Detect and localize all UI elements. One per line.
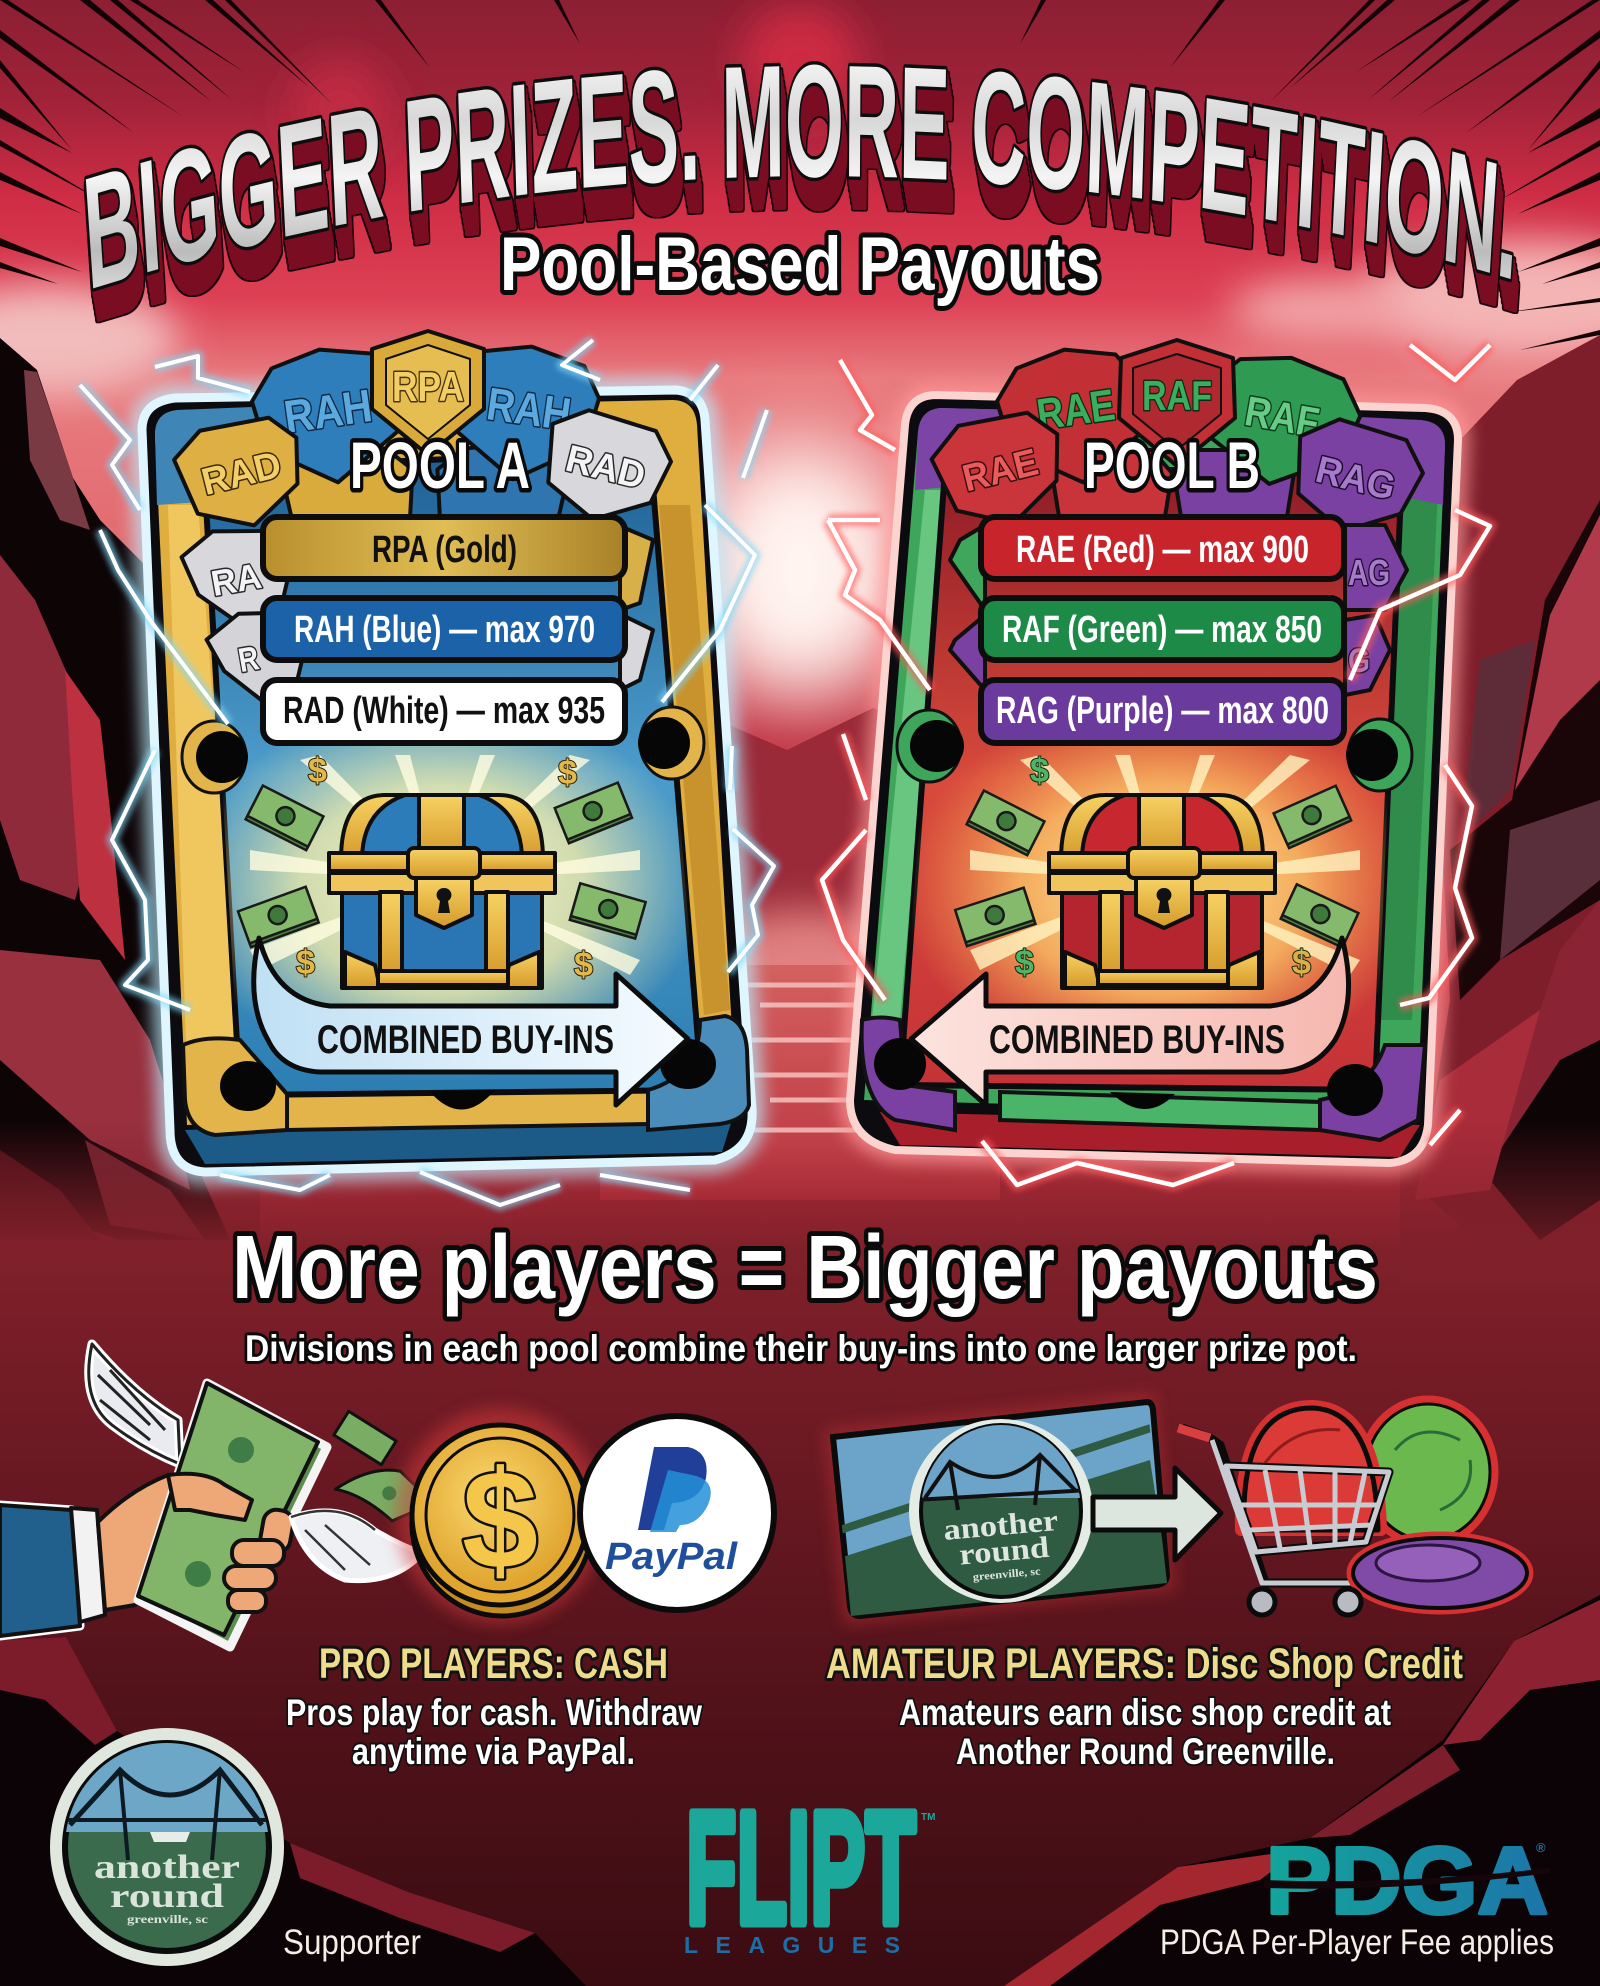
heading: pro players: PRO PLAYERS: CASH: [319, 1640, 668, 1688]
background: bottom left cliff: [0, 1637, 586, 1986]
badge gold right mid: [620, 526, 653, 610]
illustration: pro cash hand and money: [0, 1344, 439, 1647]
badge RAE top: RAE: [1034, 380, 1118, 440]
dollar signs pool A: [296, 752, 593, 984]
icon: paypal: [580, 1416, 774, 1610]
icon: sleeve and cuff: [0, 1505, 105, 1636]
bill: [570, 883, 646, 939]
treasure chest pool B: [1049, 795, 1275, 988]
badge RAD white left low: R: [236, 639, 262, 680]
pill RAF green: RAF (Green) — max 850: [1002, 609, 1322, 651]
icon: shopping cart: [1178, 1428, 1389, 1583]
badge blue lower: [430, 439, 570, 567]
paypal wordmark: PayPal: [605, 1536, 739, 1578]
logo: flipt leagues: LEAGUES: [684, 1932, 900, 1958]
heading: more players: More players = Bigger payouts: [232, 1218, 1378, 1318]
table frame pool A: [142, 390, 752, 1172]
icon: lower wing: [291, 1511, 423, 1581]
logo: another round badge: [50, 1728, 284, 1966]
pill RAH blue: RAH (Blue) — max 970: [294, 609, 595, 651]
dollar signs pool B: $: [1292, 944, 1311, 982]
arrow combined buy-ins pool B: COMBINED BUY-INS: [989, 1018, 1285, 1062]
chest glow pool A: [223, 746, 689, 1076]
badge RAG right: RAG: [1312, 449, 1399, 509]
badge RAF green: RAF: [1242, 387, 1323, 446]
badge RPA: [372, 331, 484, 455]
badges pool A: [169, 331, 678, 713]
badge RAE left: RAE: [959, 441, 1042, 501]
dollar signs pool A: $: [574, 946, 593, 984]
badge purple right mid: [1345, 525, 1407, 610]
background: right cliff: [1415, 335, 1600, 1280]
money pool B: [955, 786, 1358, 947]
pill RAG purple: [981, 680, 1344, 743]
badge RAF top: [1119, 340, 1235, 466]
badges pool B: [925, 340, 1431, 695]
pockets pool B: [874, 710, 1412, 1116]
pill RAE red: RAE (Red) — max 900: [1016, 529, 1309, 571]
badge RAD white: RAD: [562, 438, 649, 498]
card badge: round: [958, 1531, 1051, 1572]
logo: another round badge: greenville, sc: [127, 1912, 209, 1926]
dollar signs pool B: $: [1030, 752, 1049, 790]
logo: flipt leagues: [684, 1778, 935, 1958]
dollar signs pool B: [1015, 752, 1311, 982]
badge RAE top: [991, 340, 1152, 493]
badge RAH left: RAH: [281, 379, 375, 443]
background: bottom right cliff: [1004, 1595, 1600, 1986]
badge RAH right: RAH: [484, 377, 574, 440]
icon: red disc: [1241, 1406, 1381, 1530]
badge white right low: [620, 614, 653, 690]
pill RAF green: [981, 598, 1344, 660]
card badge: greenville, sc: [972, 1566, 1041, 1583]
badge gold lower: [280, 439, 420, 567]
badge RPA: RPA: [392, 363, 464, 410]
arrow combined buy-ins pool A: [254, 938, 688, 1105]
icon: cash stack: [138, 1383, 327, 1647]
pill RPA gold: [263, 517, 625, 579]
icon: purple disc: [1350, 1535, 1530, 1611]
pill RAD white: RAD (White) — max 935: [283, 690, 605, 732]
icon: gold dollar coin: $: [462, 1441, 538, 1598]
badge RAD gold: RAD: [198, 444, 285, 504]
badge RAE left: [925, 403, 1076, 539]
logo: pdga: PDGA: [1266, 1828, 1548, 1934]
text: amateur description: Another Round Greenville.: [956, 1731, 1335, 1772]
icon: palm: [98, 1475, 200, 1610]
table frame pool B: [850, 395, 1458, 1163]
badge lower left: [1052, 450, 1172, 558]
chest glow pool B: [912, 746, 1387, 1010]
dollar signs pool A: $: [308, 752, 327, 790]
bill: [967, 791, 1044, 855]
badge purple right mid: AG: [1348, 552, 1390, 593]
badge purple right low: G: [1348, 642, 1370, 680]
dollar signs pool A: $: [558, 754, 577, 792]
lightning pool A: [80, 340, 774, 1205]
badge RAD white left mid: RA: [208, 555, 264, 604]
bill: [955, 888, 1035, 946]
icon: flying bill: [331, 1456, 439, 1530]
arrow combined buy-ins pool B: [911, 938, 1349, 1105]
paypal P mark: [638, 1447, 711, 1532]
badge RAD white left mid: [178, 519, 299, 636]
label: supporter: Supporter: [283, 1923, 421, 1962]
icon: green disc: [1362, 1400, 1494, 1544]
heading: amateur players: AMATEUR PLAYERS: Disc Shop Credit: [826, 1640, 1463, 1688]
background: left cliff: [0, 338, 230, 1240]
pool B label: POOL B: [1084, 428, 1260, 502]
bill: [555, 783, 632, 843]
badge purple right low: [1345, 615, 1390, 695]
badge RAD white: [533, 402, 678, 534]
arrow: credit to cart: [1093, 1468, 1221, 1560]
icon: thumb and fingers: [168, 1474, 295, 1612]
dollar signs pool B: $: [1015, 944, 1034, 982]
background: comic speed lines right: [1020, 0, 1600, 350]
background: comic speed lines left: [0, 0, 580, 284]
logo: flipt leagues: TM: [921, 1812, 935, 1823]
text: pro description: [286, 1692, 702, 1772]
logo: flipt leagues: FLIPT: [686, 1778, 916, 1957]
text: amateur description: [899, 1692, 1391, 1772]
panel: pool B table: [822, 340, 1490, 1185]
badge RAF top: RAF: [1142, 372, 1212, 419]
panel: pool A table: [80, 331, 774, 1205]
subheading: divisions: Divisions in each pool combine their buy-ins into one larger prize pot.: [245, 1328, 1357, 1369]
title: BIGGER PRIZES. MORE COMPETITION.: [84, 61, 1520, 324]
dollar signs pool A: $: [296, 944, 315, 982]
arrow combined buy-ins pool A: COMBINED BUY-INS: [317, 1018, 614, 1062]
icon: gold dollar coin: [396, 1408, 604, 1624]
text: pro description: anytime via PayPal.: [352, 1731, 635, 1772]
text: amateur description: Amateurs earn disc shop credit at: [899, 1692, 1391, 1733]
badge purple left low: [950, 615, 985, 690]
money pool A: [238, 783, 646, 947]
background: cliff base fade: [0, 1120, 1600, 1285]
text: pro description: Pros play for cash. Withdraw: [286, 1692, 702, 1733]
pill RAH blue: [263, 598, 625, 660]
treasure chest pool A: [329, 795, 555, 988]
subtitle: Pool-Based Payouts: [500, 222, 1100, 307]
badge lower right: [1174, 450, 1294, 558]
badge RAF green: [1192, 344, 1368, 498]
badge RAG right: [1280, 411, 1431, 547]
icon: discs and cart: [1178, 1400, 1530, 1615]
icon: flying bill: [334, 1411, 396, 1465]
badge green left mid: [950, 525, 985, 610]
lightning pool B: [822, 345, 1490, 1185]
icon: upper wing: [89, 1344, 180, 1464]
illustration: shop credit card: [833, 1402, 1170, 1620]
icon: cart wheels: [1249, 1589, 1361, 1615]
logo: another round badge: another: [94, 1849, 240, 1886]
badge RAH left: [246, 340, 407, 493]
pill RPA gold: RPA (Gold): [372, 529, 517, 571]
bill: [238, 887, 319, 947]
badge RAH right: [444, 337, 605, 490]
card badge: [909, 1419, 1093, 1603]
badge RAD gold: [169, 408, 314, 540]
pool A label: POOL A: [350, 428, 530, 502]
logo: another round badge: round: [110, 1878, 224, 1915]
bill: [1281, 884, 1358, 947]
badge RAD white left low: [203, 603, 314, 713]
card badge: another: [942, 1504, 1059, 1547]
bill: [1274, 786, 1351, 848]
background: distant mountains and water: [600, 708, 1000, 1200]
pockets pool A: [182, 707, 716, 1111]
pill RAD white: [263, 680, 625, 743]
pill RAE red: [981, 517, 1344, 579]
bill: [246, 786, 323, 850]
pill RAG purple: RAG (Purple) — max 800: [996, 690, 1329, 732]
logo: pdga: ®: [1536, 1840, 1546, 1855]
